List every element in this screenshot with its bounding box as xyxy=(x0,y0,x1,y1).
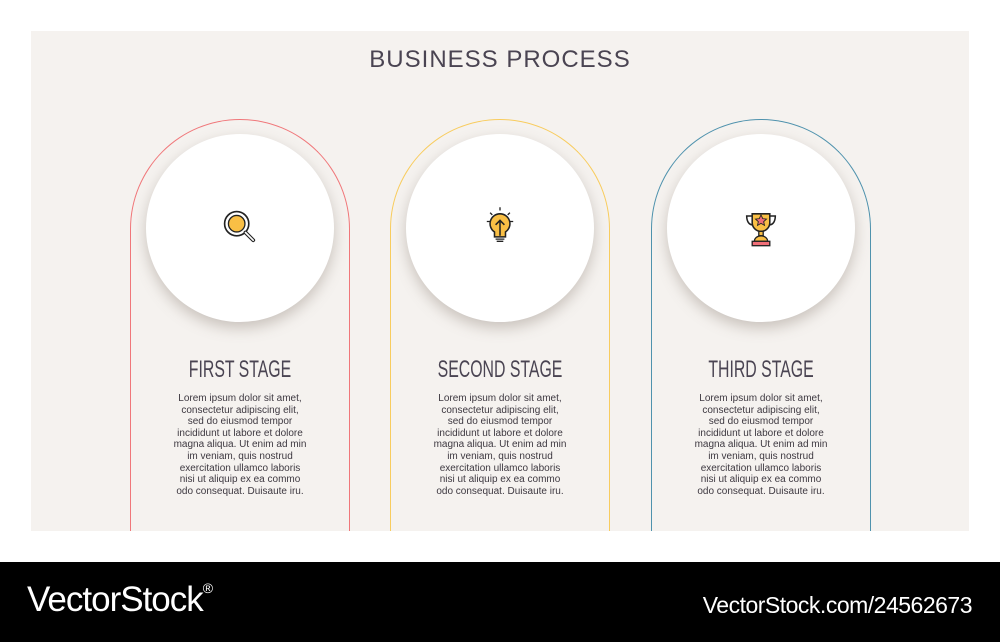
footer xyxy=(0,562,1000,642)
text: Lorem ipsum dolor sit amet, xyxy=(178,393,302,404)
text: odo consequat. Duisaute iru. xyxy=(176,486,304,497)
text: magna aliqua. Ut enim ad min xyxy=(434,439,566,450)
text: exercitation ullamco laboris xyxy=(701,463,821,474)
text: im veniam, quis nostrud xyxy=(447,451,553,462)
text: sed do eiusmod tempor xyxy=(448,416,552,427)
text: nisi ut aliquip ex ea commo xyxy=(180,474,300,485)
text: im veniam, quis nostrud xyxy=(708,451,814,462)
text: incididunt ut labore et dolore xyxy=(177,428,303,439)
stage 1 xyxy=(130,119,350,531)
text: incididunt ut labore et dolore xyxy=(698,428,824,439)
icon: magnifier xyxy=(224,210,256,242)
icon: trophy xyxy=(746,213,776,246)
text: sed do eiusmod tempor xyxy=(709,416,813,427)
icon: lightbulb xyxy=(486,207,514,242)
background panel xyxy=(31,31,969,531)
circle 3 xyxy=(667,134,855,322)
footer url: VectorStock.com/24562673 xyxy=(703,592,972,618)
text: incididunt ut labore et dolore xyxy=(437,428,563,439)
text xyxy=(174,393,306,497)
text: magna aliqua. Ut enim ad min xyxy=(174,439,306,450)
text: magna aliqua. Ut enim ad min xyxy=(695,439,827,450)
circle 1 xyxy=(146,134,334,322)
text: Lorem ipsum dolor sit amet, xyxy=(438,393,562,404)
text: exercitation ullamco laboris xyxy=(180,463,300,474)
text: Lorem ipsum dolor sit amet, xyxy=(699,393,823,404)
text: odo consequat. Duisaute iru. xyxy=(436,486,564,497)
title: BUSINESS PROCESS xyxy=(369,46,631,73)
text: nisi ut aliquip ex ea commo xyxy=(440,474,560,485)
heading: FIRST STAGE xyxy=(189,356,291,383)
text: im veniam, quis nostrud xyxy=(187,451,293,462)
heading: SECOND STAGE xyxy=(438,356,562,383)
text: sed do eiusmod tempor xyxy=(188,416,292,427)
stage 3 xyxy=(651,119,871,531)
text: consectetur adipiscing elit, xyxy=(181,405,299,416)
arch outline blue xyxy=(651,119,871,531)
text: nisi ut aliquip ex ea commo xyxy=(701,474,821,485)
stage 2 xyxy=(390,119,610,531)
text: consectetur adipiscing elit, xyxy=(441,405,559,416)
arch outline yellow xyxy=(390,119,610,531)
text xyxy=(695,393,827,497)
text xyxy=(434,393,566,497)
text: exercitation ullamco laboris xyxy=(440,463,560,474)
circle 2 xyxy=(406,134,594,322)
arch outline red xyxy=(130,119,350,531)
heading: THIRD STAGE xyxy=(708,356,814,383)
footer logo: VectorStock® xyxy=(27,580,212,619)
text: odo consequat. Duisaute iru. xyxy=(697,486,825,497)
text: consectetur adipiscing elit, xyxy=(702,405,820,416)
